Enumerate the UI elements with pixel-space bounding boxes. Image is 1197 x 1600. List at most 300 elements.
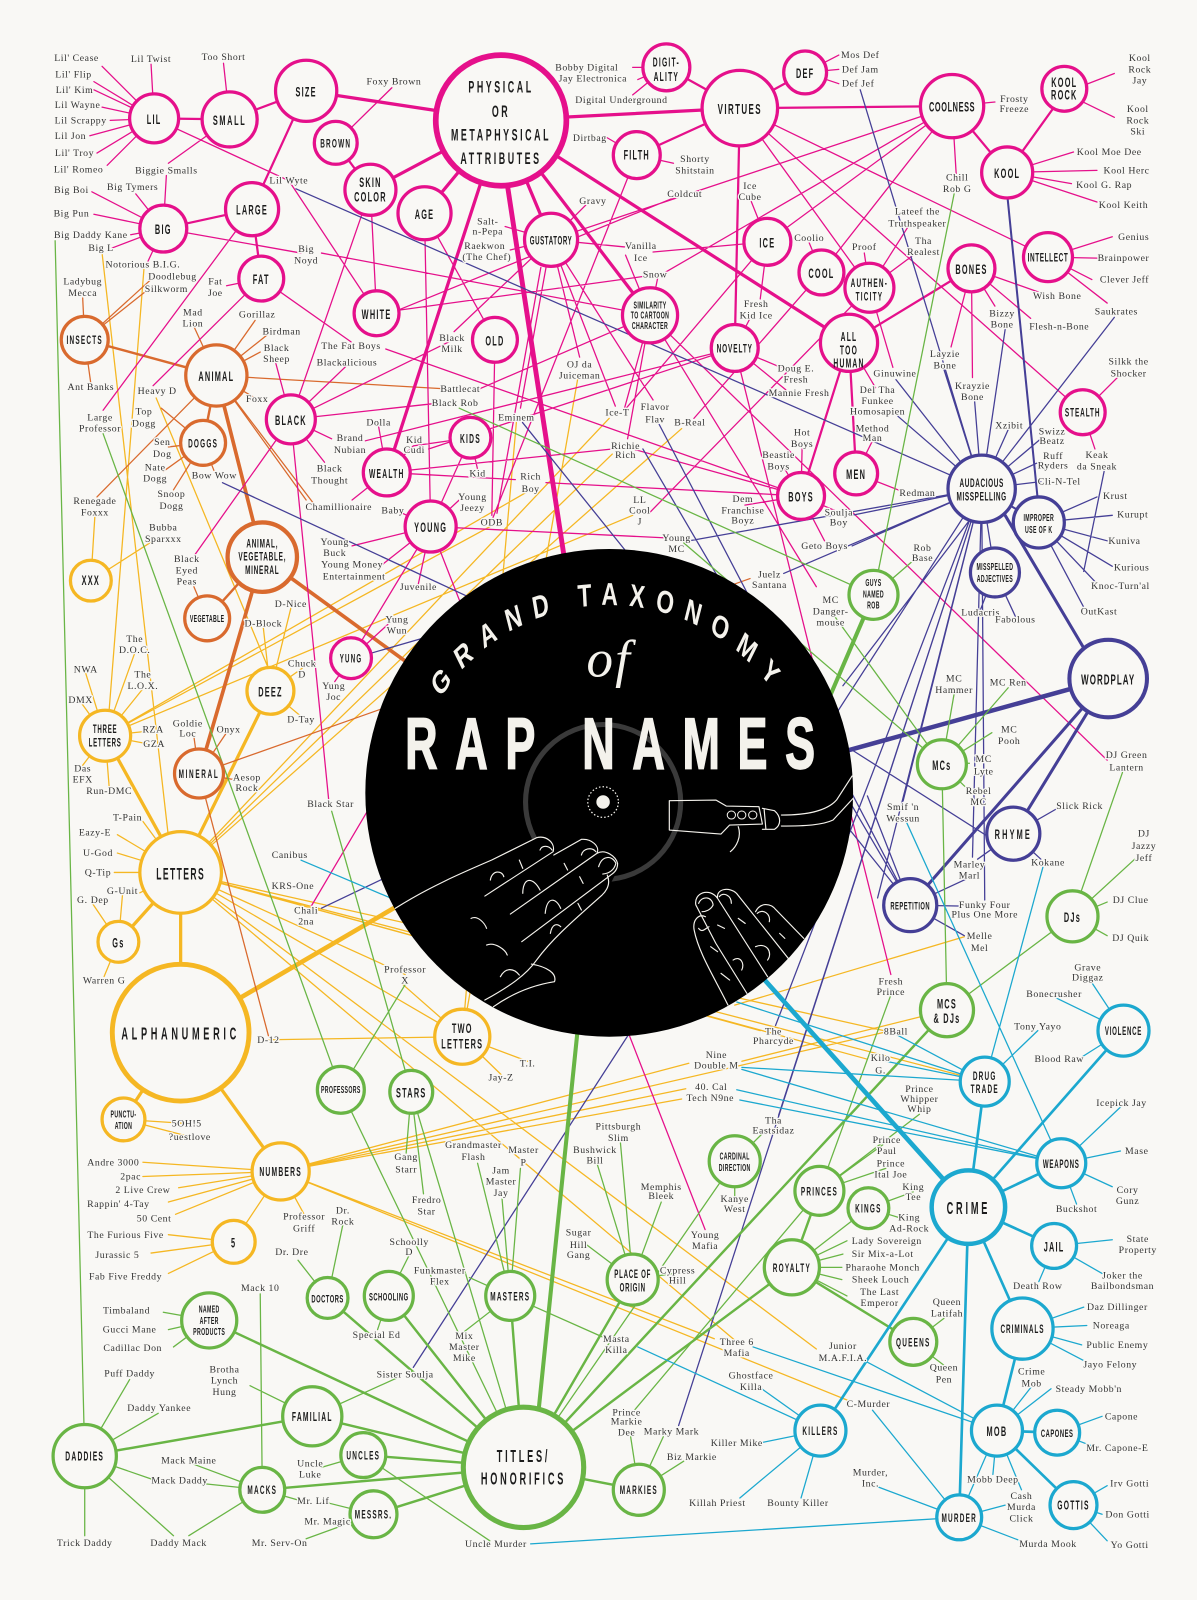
names: top centre: Eminem (498, 412, 535, 423)
names: bottom centre: Tech N9ne (686, 1093, 734, 1104)
names: right middle: DJ Quik (1112, 933, 1149, 944)
node: mineral: MINERAL (179, 768, 219, 782)
names: left middle: Run-DMC (86, 786, 132, 797)
node: digitality: ALITY (654, 71, 679, 85)
names: top centre: Blackalicious (317, 357, 377, 368)
node: physical or metaphysical attributes: PHYSICAL (468, 78, 534, 96)
node: virtues (702, 70, 778, 146)
names: top right: Rock (1126, 115, 1149, 126)
names: right middle: Flavor (641, 402, 670, 413)
node: authenticity: AUTHEN- (851, 277, 888, 291)
node: improper use of K (1013, 497, 1064, 548)
names: top left: Lil Twist (131, 54, 171, 65)
node: physical or metaphysical attributes (436, 55, 566, 186)
node: guys named rob: GUYS (865, 577, 882, 589)
node: schooling (364, 1271, 413, 1320)
node: physical or metaphysical attributes: ATTRIBUTES (460, 149, 542, 168)
names: centre left: Entertainment (323, 572, 385, 583)
links: magenta branch (90, 55, 1117, 1230)
node: MCs and DJs: MCS (937, 997, 957, 1012)
names: centre left: Young (320, 537, 349, 548)
node: alphanumeric: ALPHANUMERIC (121, 1023, 240, 1043)
names: left middle: Q-Tip (85, 868, 111, 879)
names: crime: Joker the (1102, 1271, 1143, 1282)
names: top right: Ginuwine (873, 369, 916, 380)
node: uncles (341, 1433, 386, 1478)
node: kool rock (1042, 66, 1087, 111)
node: three letters: LETTERS (89, 736, 122, 749)
node: xxx: XXX (82, 574, 100, 589)
node: xxx (70, 560, 111, 601)
node: MCs and DJs (920, 984, 974, 1037)
names: bottom left: Professor (384, 964, 426, 975)
names: right middle: Slick Rick (1056, 801, 1103, 812)
node: young: YOUNG (414, 521, 447, 536)
node: white (354, 291, 399, 336)
node: all too human: ALL (841, 331, 857, 345)
node: killers (795, 1405, 846, 1456)
node: titles honorifics: HONORIFICS (481, 1468, 566, 1488)
names: centre left: Rock (236, 783, 258, 794)
names: centre left: Kid (406, 435, 422, 446)
node: messrs (350, 1491, 397, 1538)
node: macks (240, 1467, 285, 1512)
names: bottom left: 5OH!5 (172, 1119, 202, 1130)
names: top right: Beatz (1040, 436, 1065, 447)
names: top right: Frosty (1000, 94, 1029, 105)
node: ice (744, 218, 791, 265)
names: bottom centre: The (765, 1027, 782, 1038)
title arc: GRAND TAXONOMY (432, 583, 782, 694)
names: bottom left: Schoolly (390, 1237, 429, 1248)
names: bottom centre: Tha (765, 1115, 782, 1126)
names: top right: Knoc-Turn'al (1091, 581, 1150, 592)
names: bottom left: Andre 3000 (87, 1157, 139, 1168)
names: crime: State (1127, 1234, 1149, 1245)
names: top centre: Bobby Digital (555, 62, 618, 73)
names: bottom left: Star (418, 1206, 436, 1217)
names: right middle: Funky Four (959, 900, 1010, 911)
names: left middle: Renegade (73, 496, 116, 507)
node: audacious misspelling: MISSPELLING (957, 490, 1007, 504)
record label ring (526, 724, 681, 880)
node: physical or metaphysical attributes: METAPHYSICAL (451, 125, 551, 144)
names: top left: Foxy Brown (367, 77, 421, 88)
node: animal vegetable mineral: VEGETABLE, (238, 551, 286, 564)
names: top centre: Digital Underground (575, 95, 668, 106)
names: centre left: Aesop (233, 773, 261, 784)
nodes: green (53, 570, 1098, 1538)
names: royalty: Latifah (931, 1308, 963, 1319)
names: left middle: The (126, 634, 143, 645)
names: left middle: Eyed (176, 565, 198, 576)
names: bottom left: ?uestlove (169, 1132, 211, 1143)
names: right middle: DJ Green (1106, 750, 1147, 761)
node: brown (314, 121, 357, 164)
names: royalty: The Last (860, 1287, 899, 1298)
node: two letters (435, 1009, 490, 1064)
node: macks: MACKS (247, 1484, 277, 1498)
node: digitality (643, 44, 690, 91)
names: crime: Murda Mook (1019, 1539, 1077, 1550)
node: small (202, 92, 257, 147)
node: animal: ANIMAL (198, 370, 234, 385)
node: named after products: PRODUCTS (193, 1326, 225, 1338)
names: bottom row left: Brotha (210, 1364, 240, 1375)
node: two letters: LETTERS (441, 1037, 483, 1052)
names: bottom centre: Masta (603, 1334, 630, 1345)
names: left middle: Warren G (83, 976, 125, 987)
node: guys named rob: ROB (867, 600, 880, 611)
node: mob: MOB (987, 1425, 1007, 1440)
node: brown: BROWN (320, 137, 351, 151)
names: bottom centre: Bushwick (573, 1145, 617, 1156)
names: top right: Cube (739, 192, 761, 203)
names: bottom centre: Gang (567, 1250, 590, 1261)
node: Gs (98, 921, 139, 962)
node: punctuation: ATION (115, 1120, 132, 1131)
names: right middle: Cool (629, 505, 650, 516)
names: royalty: Paul (877, 1146, 897, 1157)
names: royalty: Sheek Louch (852, 1275, 909, 1286)
names: right middle: Hot (794, 428, 810, 439)
names: bottom left: Flash (461, 1152, 486, 1163)
names: right middle: Melle (967, 931, 992, 942)
nodes: purple (884, 455, 1147, 932)
names: bottom left: P (520, 1157, 527, 1168)
names: right middle: Soulja (825, 507, 853, 518)
names: crime: Click (1009, 1513, 1033, 1524)
names: centre left: Onyx (217, 725, 241, 736)
names: bottom centre: Eastsidaz (752, 1126, 795, 1137)
node: old (472, 317, 517, 362)
node: def (784, 51, 827, 94)
node: drug trade: TRADE (971, 1083, 999, 1097)
names: top left: Big (298, 244, 314, 255)
node: place of origin: ORIGIN (620, 1281, 646, 1294)
names: right middle: MC (976, 754, 992, 765)
names: top centre: Gravy (579, 196, 607, 207)
node: punctuation: PUNCTU- (111, 1109, 136, 1120)
names: centre left: Buck (323, 548, 346, 559)
names: top left: Big Boi (54, 185, 89, 196)
names: top right: Xzibit (995, 421, 1023, 432)
node: kids (450, 417, 491, 458)
names: crime: Icepick Jay (1096, 1098, 1147, 1109)
node: two letters: TWO (452, 1022, 473, 1037)
names: top left: Lil Wayne (55, 100, 100, 111)
names: top right: Chill (946, 173, 968, 184)
names: top centre: Dirtbag (573, 133, 607, 144)
node: insects (61, 316, 108, 363)
names: royalty: G. (875, 1065, 886, 1076)
names: top centre: Shorty (680, 154, 710, 165)
names: bottom centre: M.A.F.I.A. (819, 1353, 867, 1364)
names: bottom left: Funkmaster (414, 1265, 466, 1276)
names: royalty: King (898, 1212, 920, 1223)
names: centre left: Yung (322, 681, 345, 692)
names: top centre: Jay Electronica (559, 74, 627, 85)
names: bottom centre: Hill (669, 1276, 686, 1287)
names: royalty: Pen (936, 1375, 952, 1386)
names: right middle: Plus One More (951, 909, 1018, 920)
names: right middle: Beastie (762, 450, 795, 461)
node: novelty: NOVELTY (717, 342, 753, 356)
names: right middle: Flav (645, 414, 665, 425)
node: markies: MARKIES (620, 1484, 658, 1498)
names: bottom left: Jay-Z (489, 1073, 514, 1084)
node: vegetable (185, 596, 230, 641)
node: misspelled adjectives: ADJECTIVES (977, 573, 1013, 585)
names: crime: Capone (1105, 1411, 1138, 1422)
names: bottom left: Jay (494, 1188, 508, 1199)
node: vegetable: VEGETABLE (190, 613, 225, 624)
names: bottom row left: Hung (213, 1387, 237, 1398)
names: bottom left: Special Ed (353, 1330, 400, 1341)
names: left middle: T-Pain (113, 812, 142, 823)
names: top centre: Shitstain (675, 165, 715, 176)
names: crime: Daz Dillinger (1087, 1302, 1148, 1313)
names: top centre: Battlecat (440, 384, 480, 395)
node: masters (486, 1271, 535, 1320)
names: top centre: Vanilla (625, 241, 657, 252)
node: filth (613, 132, 660, 179)
node: age: AGE (415, 208, 434, 223)
names: bottom left: D (405, 1247, 413, 1258)
names: right middle: MC (970, 797, 987, 808)
names: bottom left: Rappin' 4-Tay (87, 1199, 150, 1210)
names: centre left: D (298, 670, 306, 681)
node: fat: FAT (253, 273, 270, 288)
names: left middle: Dogg (159, 501, 183, 512)
names: bottom left: Professor (283, 1211, 325, 1222)
names: top right: Realest (907, 247, 940, 258)
names: right middle: Boyz (731, 515, 754, 526)
nodes: magenta (130, 44, 1105, 679)
node: named after products: NAMED (199, 1304, 220, 1315)
node: DJs: DJs (1064, 911, 1081, 926)
names: top centre: Milk (441, 344, 463, 355)
names: centre left: Chamillionaire (306, 502, 372, 513)
node: wealth: WEALTH (369, 468, 405, 482)
names: bottom centre: Hill (570, 1240, 587, 1251)
names: bottom left: Gang (394, 1152, 418, 1163)
names: top right: Flesh-n-Bone (1029, 322, 1089, 333)
names: right middle: Lyte (974, 766, 994, 777)
names: crime: Bonecrusher (1026, 989, 1082, 1000)
names: right middle: mouse (816, 618, 845, 629)
node: uncles: UNCLES (346, 1450, 380, 1463)
names: top right: Rock (1128, 64, 1151, 75)
names: top centre: (The Chef) (462, 252, 511, 263)
node: size: SIZE (296, 85, 317, 100)
names: bottom left: Fredro (412, 1195, 441, 1206)
names: left middle: The (134, 670, 151, 681)
names: bottom centre: Mafia (724, 1348, 750, 1359)
node: crime: CRIME (947, 1198, 990, 1218)
node: kings (848, 1188, 889, 1229)
names: royalty: Lady Sovereign (852, 1236, 922, 1247)
node: capones (1035, 1410, 1080, 1455)
node: authenticity: TICITY (856, 290, 883, 304)
node: gustatory: GUSTATORY (530, 234, 572, 247)
names: top right: Del Tha (860, 385, 895, 396)
names: crime: Irv Gotti (1110, 1479, 1149, 1490)
node: coolness (920, 74, 984, 138)
names: centre left: Jeezy (460, 503, 485, 514)
node: stealth: STEALTH (1065, 407, 1100, 420)
names: left middle: L.O.X. (127, 681, 158, 692)
node: titles honorifics (463, 1407, 584, 1528)
names: right middle: Smif 'n (887, 802, 919, 813)
names: bottom centre: Young (691, 1230, 719, 1241)
names: right middle: DJ Clue (1113, 895, 1149, 906)
names: royalty: Prince (873, 1135, 901, 1146)
names: top left: Lil' Kim (56, 85, 93, 96)
node: improper use of K: IMPROPER (1023, 512, 1054, 523)
node: murder: MURDER (941, 1512, 977, 1526)
node: doggs (181, 420, 226, 465)
node: all too human: TOO (840, 344, 858, 358)
names: bottom left: Gucci Mane (103, 1325, 156, 1336)
names: bottom centre: Cypress (660, 1265, 695, 1276)
names: top right: Wish Bone (1033, 291, 1081, 302)
names: bottom left: Dr. (336, 1205, 350, 1216)
names: top centre: OJ da (567, 359, 592, 370)
names: top right: Funkee (861, 396, 894, 407)
names: top left: Big L (88, 243, 114, 254)
names: left middle: U-God (83, 848, 113, 859)
names: top left (54, 52, 421, 365)
names: bottom left (87, 964, 539, 1364)
node: authenticity (845, 263, 894, 312)
node: named after products (182, 1293, 237, 1348)
names: crime: Crime (1018, 1366, 1045, 1377)
names: centre left: Thought (311, 476, 348, 487)
node: numbers (252, 1143, 309, 1200)
names: top left: Lion (183, 319, 203, 330)
names: top right: Ski (1130, 127, 1145, 138)
names: left middle: Dog (153, 449, 172, 460)
names: right middle: Boys (791, 439, 813, 450)
names: left middle: NWA (74, 664, 98, 675)
names: centre left: Black (317, 463, 342, 474)
names: royalty: Prince (905, 1084, 934, 1095)
node: markies (613, 1464, 664, 1515)
node: jail: JAIL (1044, 1240, 1065, 1255)
names: top right: Layzie (930, 349, 960, 360)
names: crime: Blood Raw (1035, 1054, 1084, 1065)
node: wealth (363, 449, 410, 496)
node: black (266, 395, 315, 444)
names: crime: Murda (1007, 1502, 1036, 1513)
names: left middle: Ant Banks (68, 382, 114, 393)
names: bottom centre: 40. Cal (695, 1082, 727, 1093)
names: crime: Jayo Felony (1083, 1359, 1137, 1370)
left hand (395, 837, 618, 1007)
node: intellect: INTELLECT (1028, 252, 1068, 265)
names: top right: Fresh (744, 299, 768, 310)
node: letters (140, 832, 221, 913)
node: skin color: COLOR (354, 190, 387, 205)
node: doggs: DOGGS (188, 437, 218, 451)
title of: of (587, 631, 636, 689)
node: lil: LIL (147, 113, 161, 128)
names: bottom left: Starr (395, 1164, 417, 1175)
node: animal vegetable mineral (228, 522, 297, 592)
names: top centre: Ice (634, 253, 648, 264)
names: crime: Death Row (1013, 1281, 1063, 1292)
names: right middle: Ludacris (961, 607, 1000, 618)
names: right middle: Fabolous (995, 614, 1036, 625)
names: centre left: Brand (337, 433, 363, 444)
node: MCs and DJs: & DJs (934, 1012, 960, 1027)
node: insects: INSECTS (67, 334, 103, 348)
node: stealth (1060, 390, 1105, 435)
names: centre left (173, 418, 541, 927)
names: right middle: LL (633, 495, 646, 506)
node: weapons (1037, 1139, 1086, 1188)
names: bottom left: Mix (455, 1331, 473, 1342)
names: left middle: G. Dep (77, 895, 109, 906)
names: bottom centre: Memphis (641, 1182, 682, 1193)
names: bottom centre: Bounty Killer (767, 1498, 829, 1509)
node: repetition: REPETITION (890, 900, 930, 912)
names: bottom left: Mack 10 (241, 1283, 279, 1294)
node: cool (799, 250, 844, 295)
node: black: BLACK (275, 414, 307, 429)
node: professors (317, 1066, 364, 1113)
names: top centre: Black Rob (432, 398, 478, 409)
names: bottom centre: West (724, 1204, 746, 1215)
names: right middle: Boys (767, 461, 790, 472)
names: bottom row left: Lynch (211, 1376, 238, 1387)
names: top left: Noyd (294, 255, 318, 266)
node: drug trade: DRUG (973, 1070, 997, 1084)
names: bottom left: Flex (430, 1277, 450, 1288)
names: bottom centre: Three 6 (720, 1337, 754, 1348)
names: bottom row left: Daddy Mack (150, 1538, 207, 1549)
names: right middle: Boy (830, 518, 848, 529)
node: five (212, 1220, 255, 1263)
names: crime: Don Gotti (1105, 1509, 1150, 1520)
names: right middle (605, 402, 1156, 954)
names: left middle: Dogg (143, 474, 167, 485)
names: crime: Yo Gotti (1111, 1540, 1149, 1551)
names: top right: Kool Moe Dee (1077, 147, 1142, 158)
names: right middle: Ice-T (605, 407, 629, 418)
title main: RAP NAMES (405, 702, 815, 784)
names: bottom left: Master (508, 1145, 539, 1156)
names: centre left: Chali (294, 905, 318, 916)
node: similarity to cartoon character: SIMILARITY (634, 300, 667, 311)
names: bottom centre: Murder, (853, 1468, 888, 1479)
names: left middle: G-Unit (107, 886, 138, 897)
names: top right: Jay (1132, 76, 1147, 87)
node: kings: KINGS (855, 1203, 882, 1216)
names: bottom row left: Mack Maine (161, 1455, 216, 1466)
names: top right: Kool Keith (1099, 200, 1148, 211)
names: top left: Lil' Troy (55, 148, 94, 159)
names: royalty: Whip (907, 1104, 931, 1115)
node: coolness: COOLNESS (929, 100, 975, 115)
node: rhyme (987, 807, 1040, 860)
names: bottom left: Dr. Dre (275, 1247, 309, 1258)
names: top right: Krayzie (955, 381, 990, 392)
names: right middle: DJ (1138, 829, 1150, 840)
names: bottom left: Jam (492, 1165, 510, 1176)
node: young (405, 501, 456, 552)
